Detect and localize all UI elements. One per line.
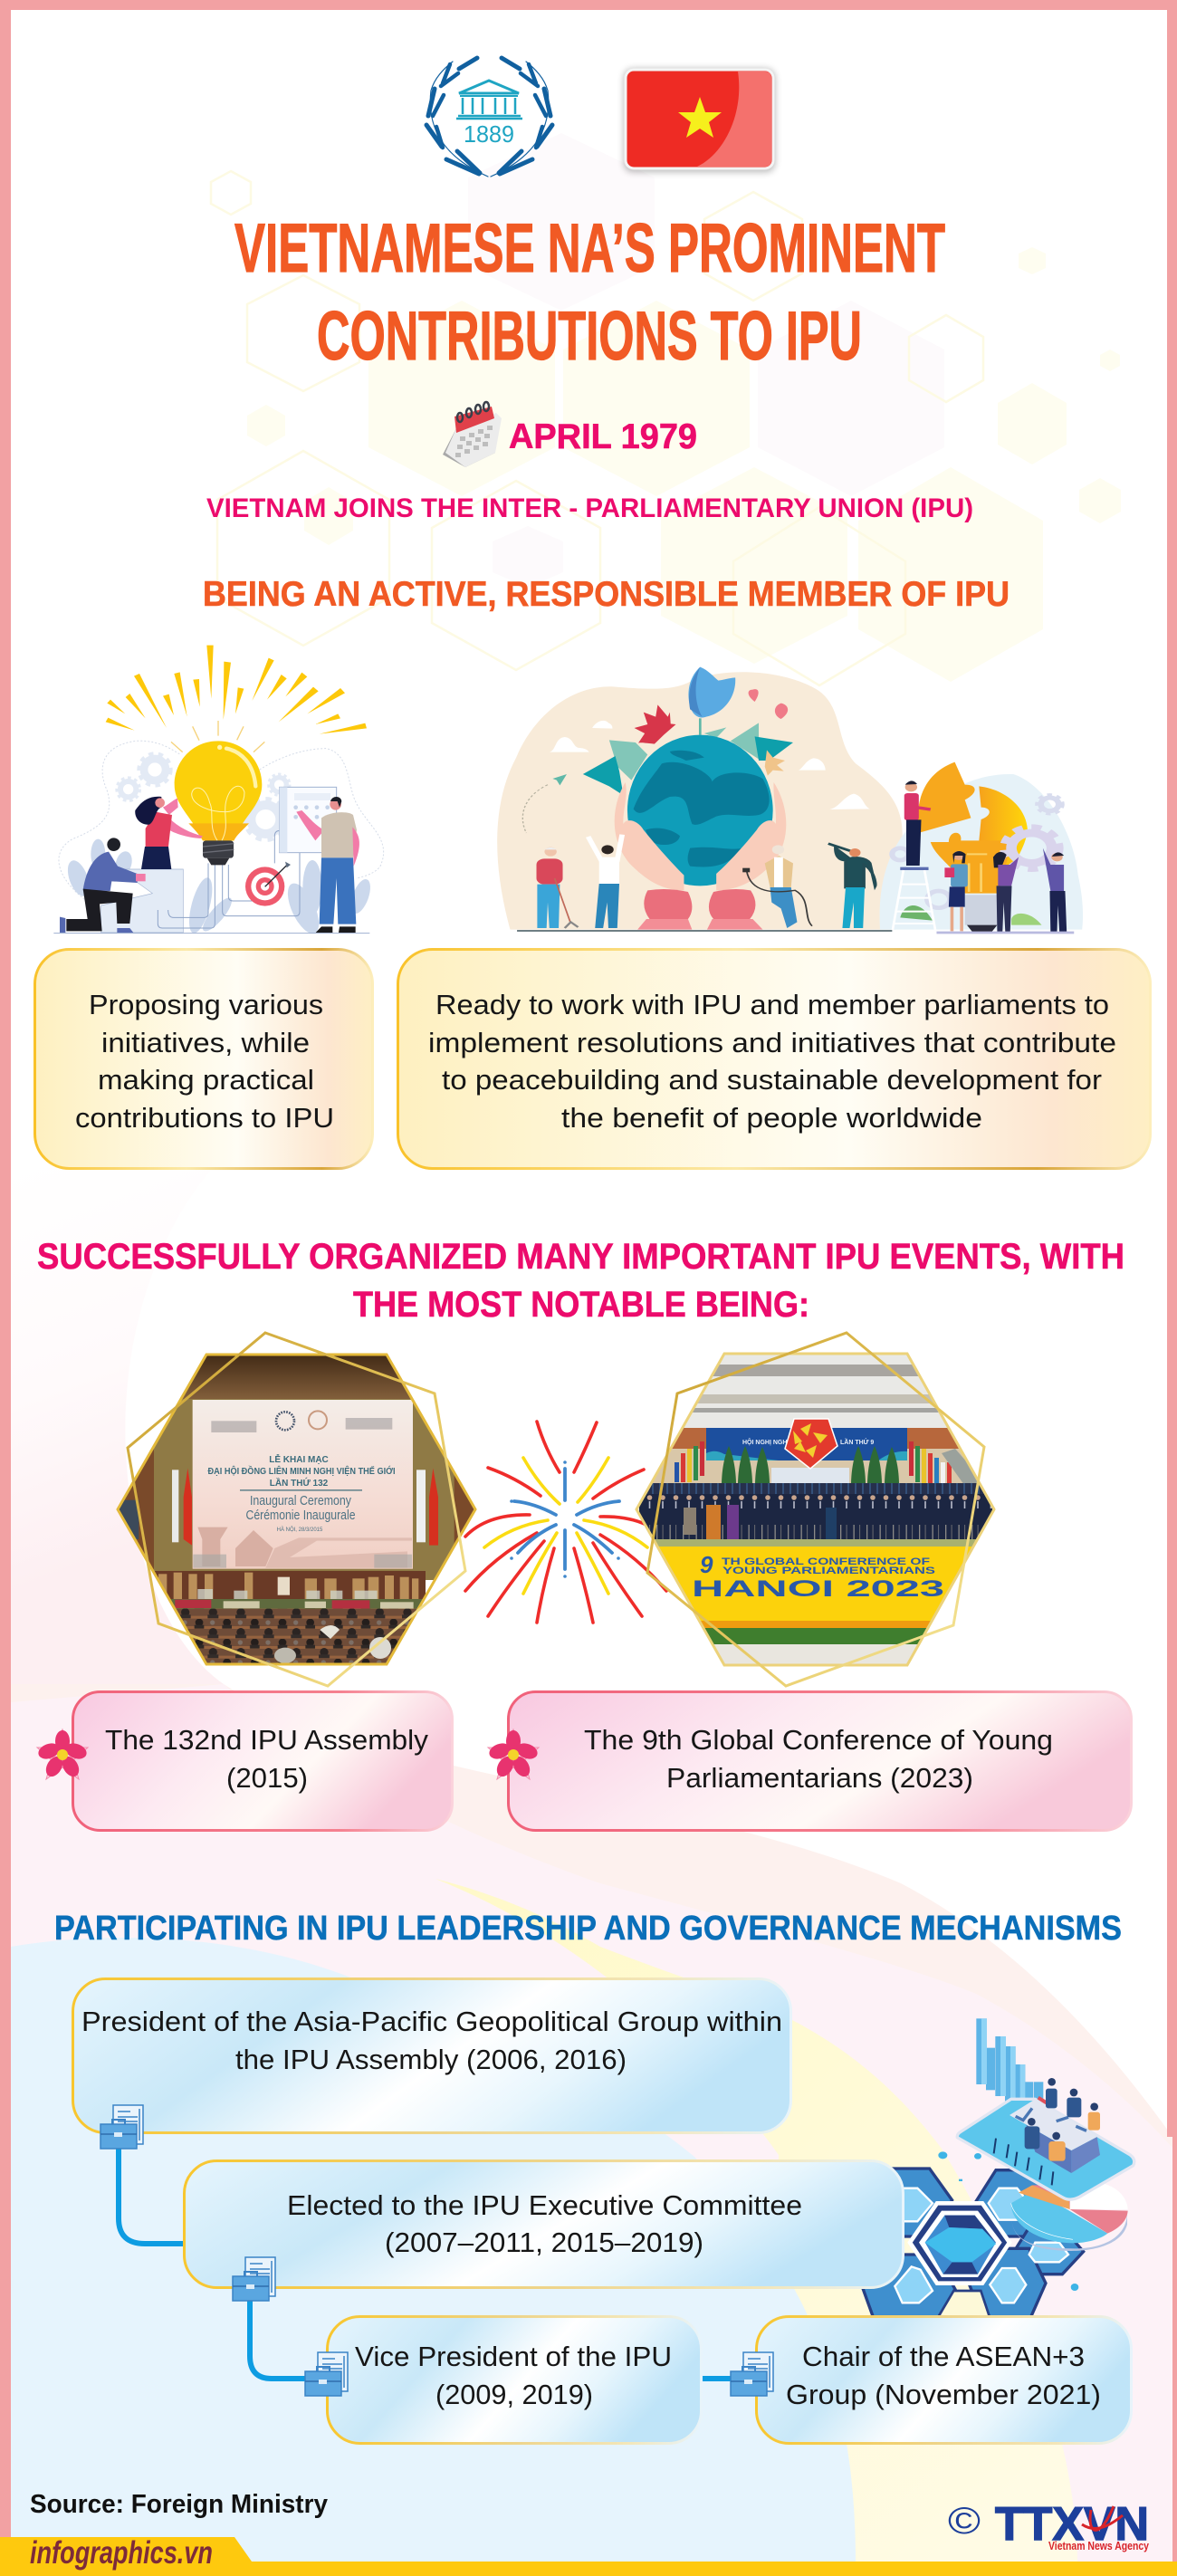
illustration: team around light bulb (53, 646, 384, 938)
panel: Asia-Pacific Geopolitical Group president: the IPU Assembly (2006, 2016) (235, 2044, 627, 2075)
panel: IPU Executive Committee: Elected to the IPU Executive Committee (287, 2189, 802, 2221)
date: April 1979: APRIL 1979 (509, 417, 697, 456)
connector: vice president to ASEAN+3 chair (702, 2376, 733, 2381)
illustration: hands holding globe with people and puzzle bulb (497, 667, 1083, 933)
footer bar with infographics.vn (0, 2535, 1177, 2576)
icon: pink flower (487, 1729, 540, 1779)
copyright and TTXVN logo: Vietnam News Agency (1048, 2540, 1149, 2552)
photo: 132nd IPU Assembly opening: Cérémonie Inaugurale (246, 1508, 355, 1523)
panel: IPU Executive Committee: (2007–2011, 2015–2019) (385, 2226, 703, 2258)
photo: 132nd IPU Assembly opening: LẦN THỨ 132 (270, 1477, 329, 1489)
section heading: IPU events: THE MOST NOTABLE BEING: (353, 1285, 809, 1325)
photo: 9th Global Conference of Young Parliamentarians: HỘI NGHỊ NGHỊ (742, 1438, 789, 1446)
photo: 9th Global Conference of Young Parliamentarians (634, 1333, 996, 1686)
section heading: active member: BEING AN ACTIVE, RESPONSIBLE MEMBER OF IPU (203, 575, 1010, 614)
subheading: Vietnam joins IPU: VIETNAM JOINS THE INTER - PARLIAMENTARY UNION (IPU) (206, 493, 973, 523)
panel: proposing initiatives (34, 949, 373, 1168)
panel: 9th Global Conference of Young Parliamentarians (509, 1691, 1132, 1831)
copyright and TTXVN logo: © (948, 2499, 981, 2542)
photo: 132nd IPU Assembly opening: HÀ NỘI, 28/3/2015 (277, 1527, 323, 1533)
IPU 1889 logo (426, 58, 552, 177)
panel: Asia-Pacific Geopolitical Group president: President of the Asia-Pacific Geopolitical Group within (81, 2006, 782, 2037)
panel: ASEAN+3 Group chair: Group (November 2021) (786, 2379, 1101, 2410)
section heading: IPU events (37, 1237, 1124, 1325)
photo: 132nd IPU Assembly opening (109, 1333, 489, 1686)
icon: calendar (443, 402, 502, 467)
panel: ASEAN+3 Group chair: Chair of the ASEAN+3 (802, 2341, 1085, 2372)
panel: proposing initiatives: contributions to IPU (75, 1102, 334, 1134)
panel: ready to work with IPU: implement resolutions and initiatives that contribute (428, 1027, 1116, 1058)
photo: 9th Global Conference of Young Parliamentarians: YOUNG PARLIAMENTARIANS (722, 1566, 935, 1576)
photo: 132nd IPU Assembly opening: Inaugural Ceremony (250, 1494, 352, 1508)
panel: 9th Global Conference of Young Parliamentarians: The 9th Global Conference of Young (584, 1724, 1053, 1756)
icon: firework burst (465, 1422, 666, 1623)
connector: president to executive committee (119, 2146, 185, 2244)
panel: 132nd IPU Assembly: The 132nd IPU Assembly (105, 1724, 429, 1756)
icon: briefcase and document (731, 2352, 773, 2396)
photo: 132nd IPU Assembly opening: ĐẠI HỘI ĐỒNG LIÊN MINH NGHỊ VIỆN THẾ GIỚI (208, 1465, 396, 1477)
background: pale hexagon pattern (211, 133, 1121, 685)
illustration: hexagons, meeting table and charts (863, 2018, 1134, 2327)
panel: proposing initiatives: making practical (98, 1064, 314, 1096)
icon: briefcase and document (233, 2257, 275, 2301)
source note: Source: Foreign Ministry (30, 2490, 328, 2519)
icon: pink flower (36, 1729, 89, 1779)
icon: briefcase and document (305, 2352, 348, 2396)
panel: proposing initiatives: Proposing various (89, 989, 323, 1020)
footer bar with infographics.vn: infographics.vn (30, 2535, 213, 2571)
title: CONTRIBUTIONS TO IPU (317, 298, 862, 375)
copyright and TTXVN logo: TTXVN (995, 2498, 1149, 2551)
Vietnam flag icon (624, 69, 775, 172)
panel: IPU Vice President (328, 2316, 701, 2443)
panel: proposing initiatives: initiatives, while (101, 1027, 310, 1058)
connector: executive committee to vice president (250, 2298, 306, 2379)
icon: briefcase and document (100, 2105, 143, 2149)
panel: ASEAN+3 Group chair (757, 2316, 1132, 2443)
photo: 9th Global Conference of Young Parliamentarians: HANOI 2023 (692, 1576, 944, 1602)
photo: 9th Global Conference of Young Parliamentarians: LẦN THỨ 9 (840, 1437, 874, 1446)
background: soft coloured waves (11, 1168, 1172, 2562)
panel: IPU Vice President: (2009, 2019) (435, 2379, 593, 2410)
panel: Asia-Pacific Geopolitical Group president (72, 1979, 791, 2133)
photo: 9th Global Conference of Young Parliamentarians: 9 (700, 1551, 713, 1578)
panel: ready to work with IPU: the benefit of people worldwide (561, 1102, 982, 1134)
panel: ready to work with IPU (398, 949, 1150, 1168)
panel: ready to work with IPU: to peacebuilding and sustainable development for (442, 1064, 1102, 1096)
panel: 9th Global Conference of Young Parliamentarians: Parliamentarians (2023) (666, 1762, 973, 1794)
panel: IPU Vice President: Vice President of the IPU (355, 2341, 672, 2372)
IPU 1889 logo: 1889 (464, 120, 514, 148)
panel: 132nd IPU Assembly: (2015) (226, 1762, 308, 1794)
panel: 132nd IPU Assembly (72, 1691, 453, 1831)
panel: IPU Executive Committee (185, 2160, 904, 2287)
photo: 132nd IPU Assembly opening: LỄ KHAI MẠC (269, 1453, 329, 1465)
photo: 9th Global Conference of Young Parliamentarians: TH GLOBAL CONFERENCE OF (722, 1556, 930, 1567)
title (234, 210, 945, 375)
panel: ready to work with IPU: Ready to work with IPU and member parliaments to (435, 989, 1109, 1020)
